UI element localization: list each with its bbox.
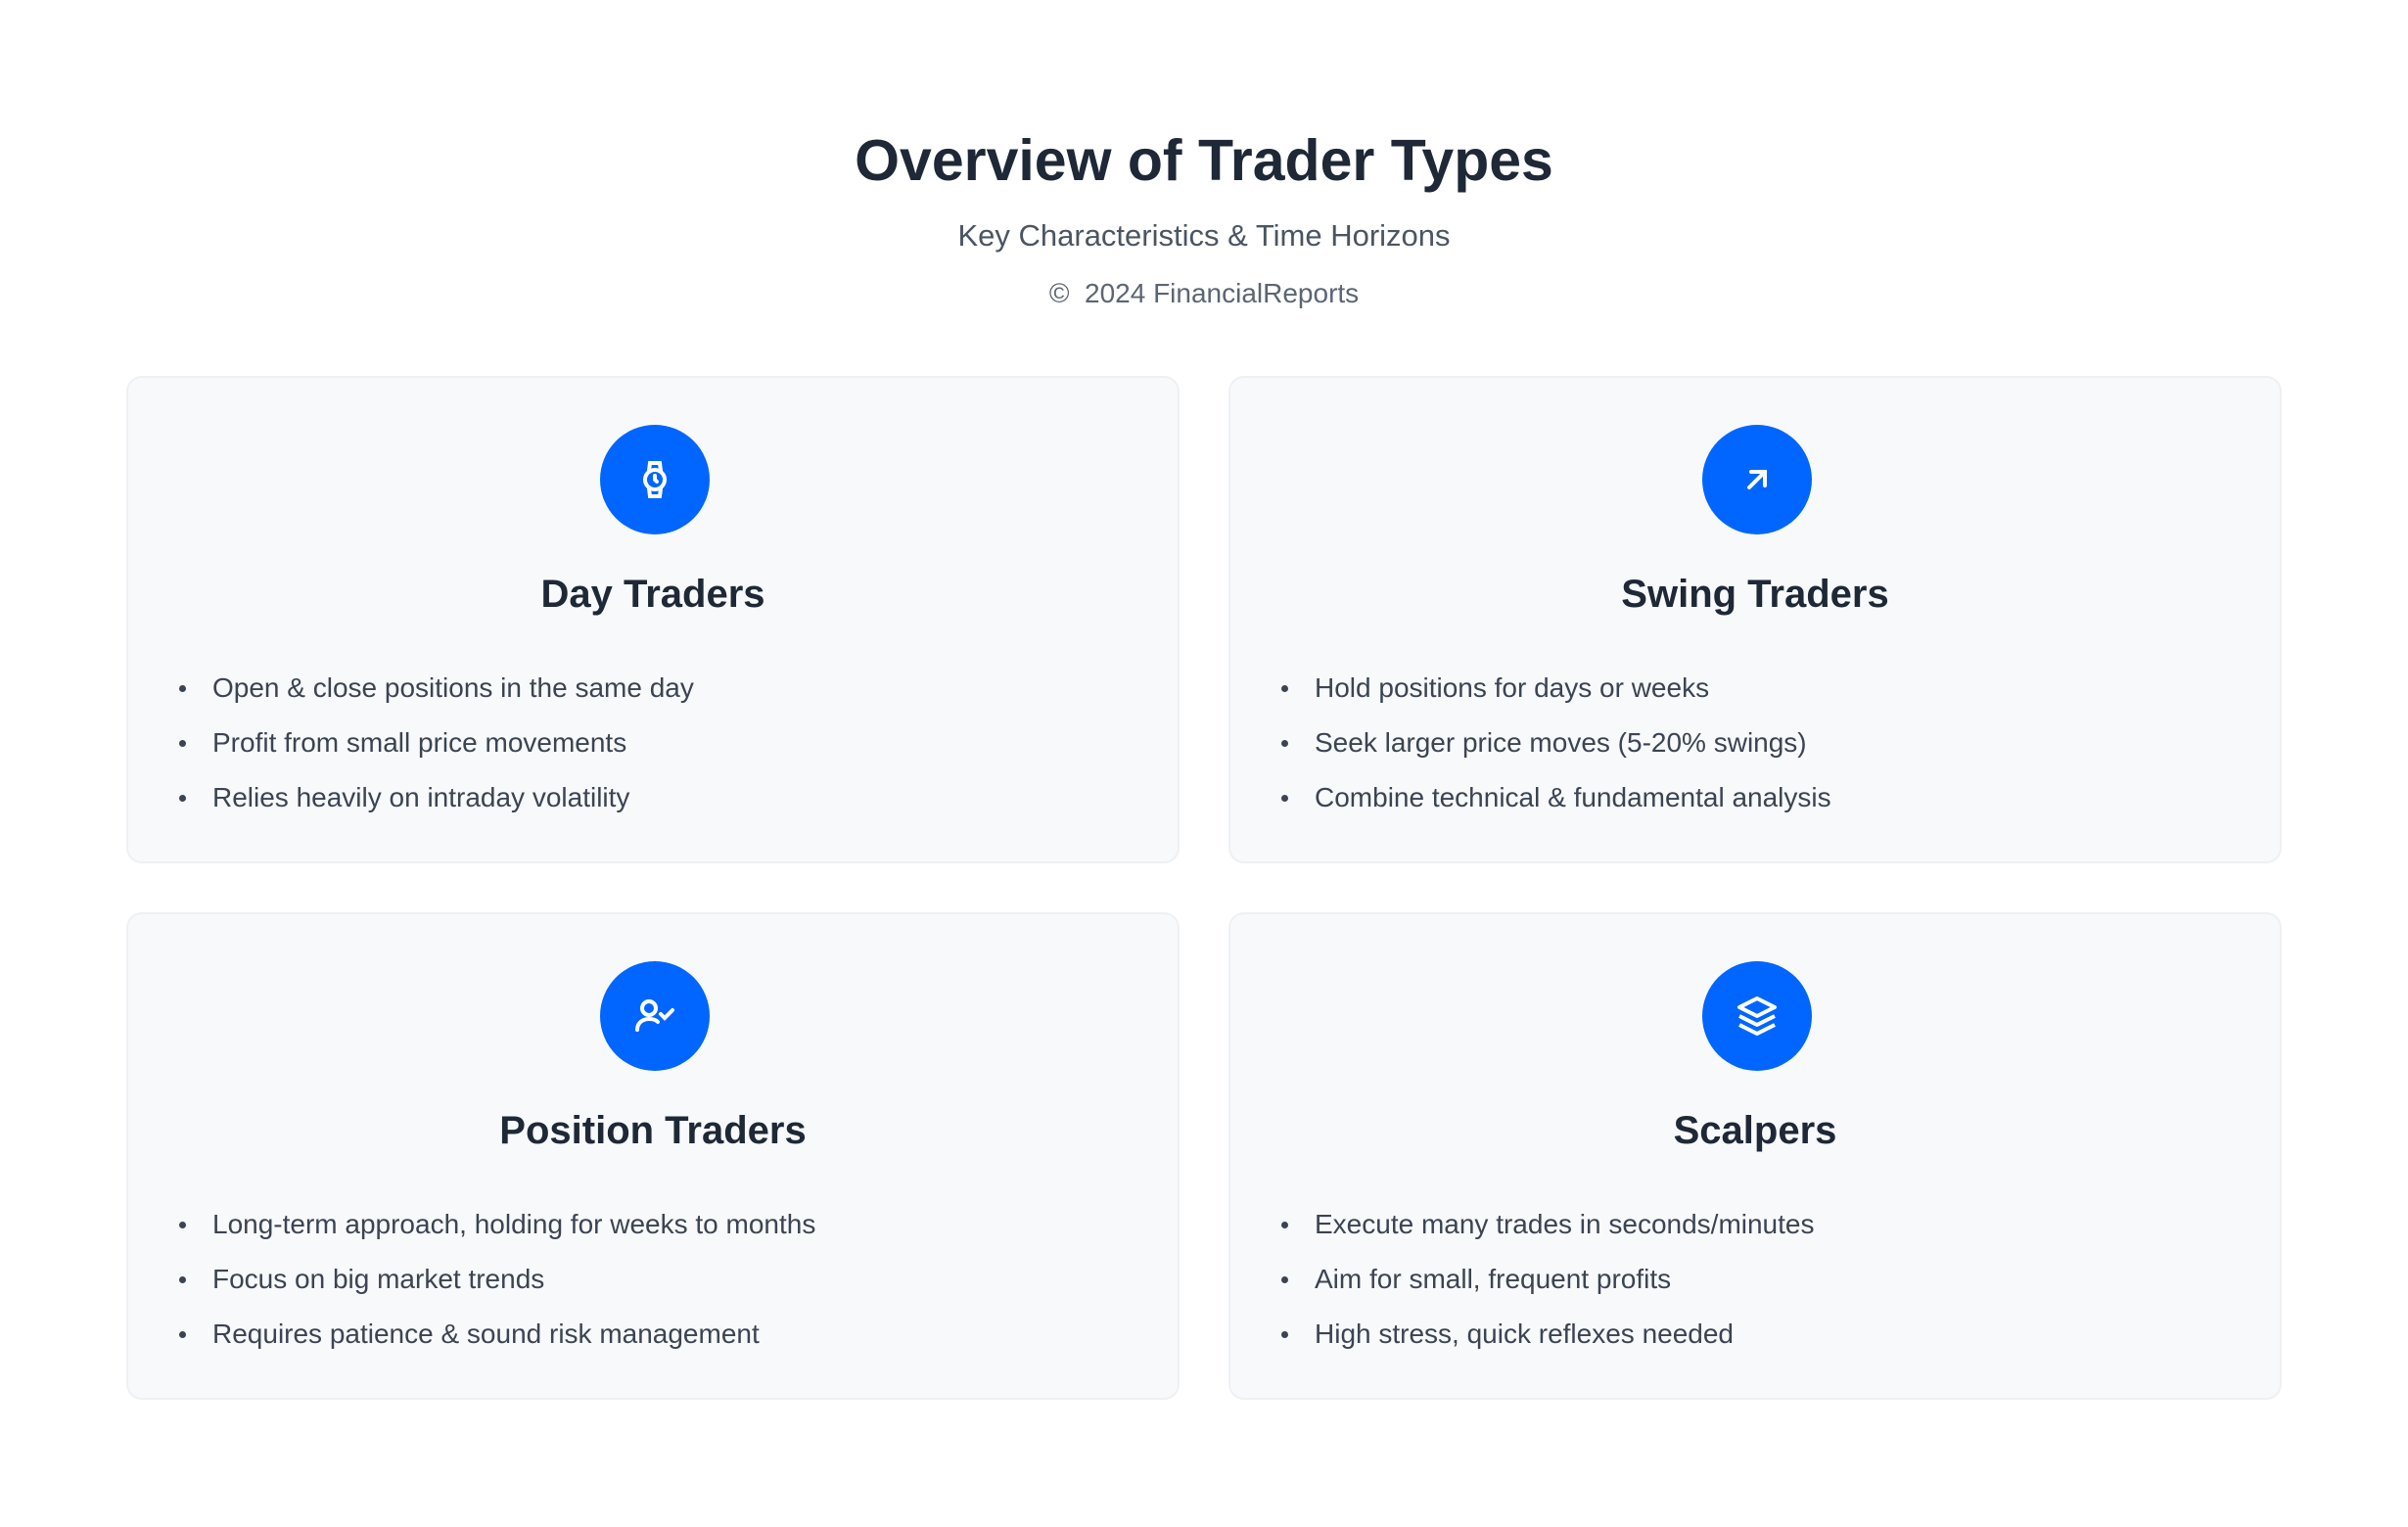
heading: Swing Traders [1621,573,1889,616]
bullets: Long-term approach, holding for weeks to months [212,1209,815,1239]
panel: scalpers [1228,912,2282,1400]
bullets: Combine technical & fundamental analysis [1315,782,1831,812]
copyright: © 2024 FinancialReports [1049,278,1359,308]
icon: layers [1702,961,1812,1071]
panel: day traders [126,376,1180,863]
bullets [1281,1209,1814,1349]
bullets: Profit from small price movements [212,727,626,758]
bullets: High stress, quick reflexes needed [1315,1319,1734,1349]
icon: watch [600,425,710,534]
heading: Day Traders [540,573,765,616]
bullets: Seek larger price moves (5-20% swings) [1315,727,1807,758]
bullets: Aim for small, frequent profits [1315,1264,1671,1294]
bullets [179,672,694,812]
panel: swing traders [1228,376,2282,863]
icon: arrow [1702,425,1812,534]
bullets: Hold positions for days or weeks [1315,672,1709,703]
bullets [179,1209,815,1349]
bullets: Focus on big market trends [212,1264,544,1294]
panel: position traders [126,912,1180,1400]
bullets: Execute many trades in seconds/minutes [1315,1209,1814,1239]
heading: Position Traders [499,1109,807,1152]
heading: Scalpers [1674,1109,1836,1152]
title: Overview of Trader Types [855,128,1553,193]
subtitle: Key Characteristics & Time Horizons [957,218,1451,253]
bullets [1281,672,1831,812]
bullets: Relies heavily on intraday volatility [212,782,629,812]
icon: user check [600,961,710,1071]
bullets: Requires patience & sound risk management [212,1319,760,1349]
bullets: Open & close positions in the same day [212,672,694,703]
